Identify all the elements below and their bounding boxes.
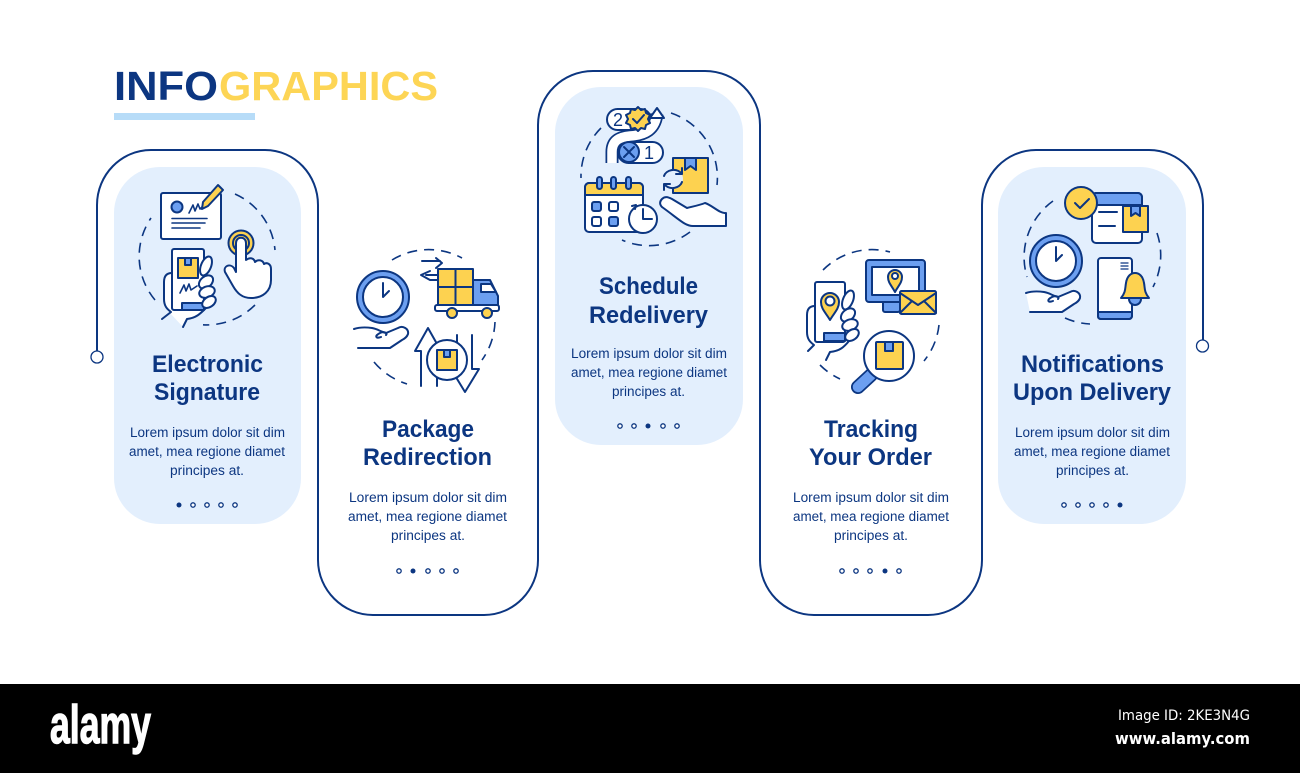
footer band with stock logo and image id: alamy <box>50 695 151 755</box>
body text: amet, mea regione diamet <box>129 444 285 459</box>
title <box>114 63 438 120</box>
title: GRAPHICS <box>219 63 438 109</box>
pagination dots <box>176 502 237 508</box>
body text: principes at. <box>391 528 465 543</box>
panel: tracking your order <box>793 250 949 574</box>
body text <box>348 490 507 543</box>
pagination dots <box>840 568 901 574</box>
pagination dots <box>1062 502 1122 508</box>
heading <box>1013 351 1172 406</box>
timeline outline connecting the five steps <box>91 71 1208 615</box>
heading: Tracking <box>824 416 918 443</box>
heading <box>809 416 932 471</box>
icon: route change, calendar and package in hand <box>581 107 726 246</box>
heading: Schedule <box>599 273 698 300</box>
body text: Lorem ipsum dolor sit dim <box>130 425 285 440</box>
body text: Lorem ipsum dolor sit dim <box>793 490 949 505</box>
heading: Your Order <box>809 444 932 471</box>
body text: Lorem ipsum dolor sit dim <box>1015 425 1170 440</box>
heading <box>152 351 263 406</box>
heading <box>363 416 492 471</box>
body text: principes at. <box>612 384 685 399</box>
body text: principes at. <box>1056 463 1129 478</box>
body text <box>793 490 949 543</box>
icon: clock, truck and package arrows <box>354 250 499 392</box>
body text: Lorem ipsum dolor sit dim <box>349 490 507 505</box>
footer band with stock logo and image id <box>0 684 1300 773</box>
heading: Redelivery <box>589 302 709 329</box>
icon: route change, calendar and package in hand: 2 <box>613 110 623 130</box>
heading: Upon Delivery <box>1013 379 1172 406</box>
pagination dots <box>618 424 679 428</box>
icon: phone, monitor, envelope and magnifier <box>807 250 939 387</box>
heading: Notifications <box>1021 351 1164 378</box>
icon: signature on card, phone and touch <box>139 185 275 327</box>
body text: amet, mea regione diamet <box>1014 444 1170 459</box>
heading: Signature <box>154 379 260 406</box>
heading: Package <box>382 416 474 443</box>
heading <box>589 273 709 329</box>
panel: notifications upon delivery <box>998 167 1186 524</box>
body text <box>129 425 285 478</box>
footer band with stock logo and image id: www.alamy.com <box>1115 729 1250 748</box>
pagination dots <box>397 568 458 574</box>
body text: Lorem ipsum dolor sit dim <box>571 346 727 361</box>
icon: check badge, clock and phone bell <box>1024 187 1161 324</box>
footer band with stock logo and image id: Image ID: 2KE3N4G <box>1118 708 1250 724</box>
icon: route change, calendar and package in hand: 1 <box>644 143 654 163</box>
heading: Electronic <box>152 351 263 378</box>
body text: principes at. <box>170 463 244 478</box>
title: INFO <box>114 63 218 109</box>
body text: amet, mea regione diamet <box>348 509 507 524</box>
body text: amet, mea regione diamet <box>793 509 949 524</box>
body text: principes at. <box>834 528 908 543</box>
body text <box>1014 425 1170 478</box>
panel: electronic signature <box>114 167 301 524</box>
heading: Redirection <box>363 444 492 471</box>
body text: amet, mea regione diamet <box>571 365 727 380</box>
panel: package redirection <box>348 250 507 574</box>
panel: schedule redelivery <box>555 87 743 445</box>
body text <box>571 346 727 399</box>
